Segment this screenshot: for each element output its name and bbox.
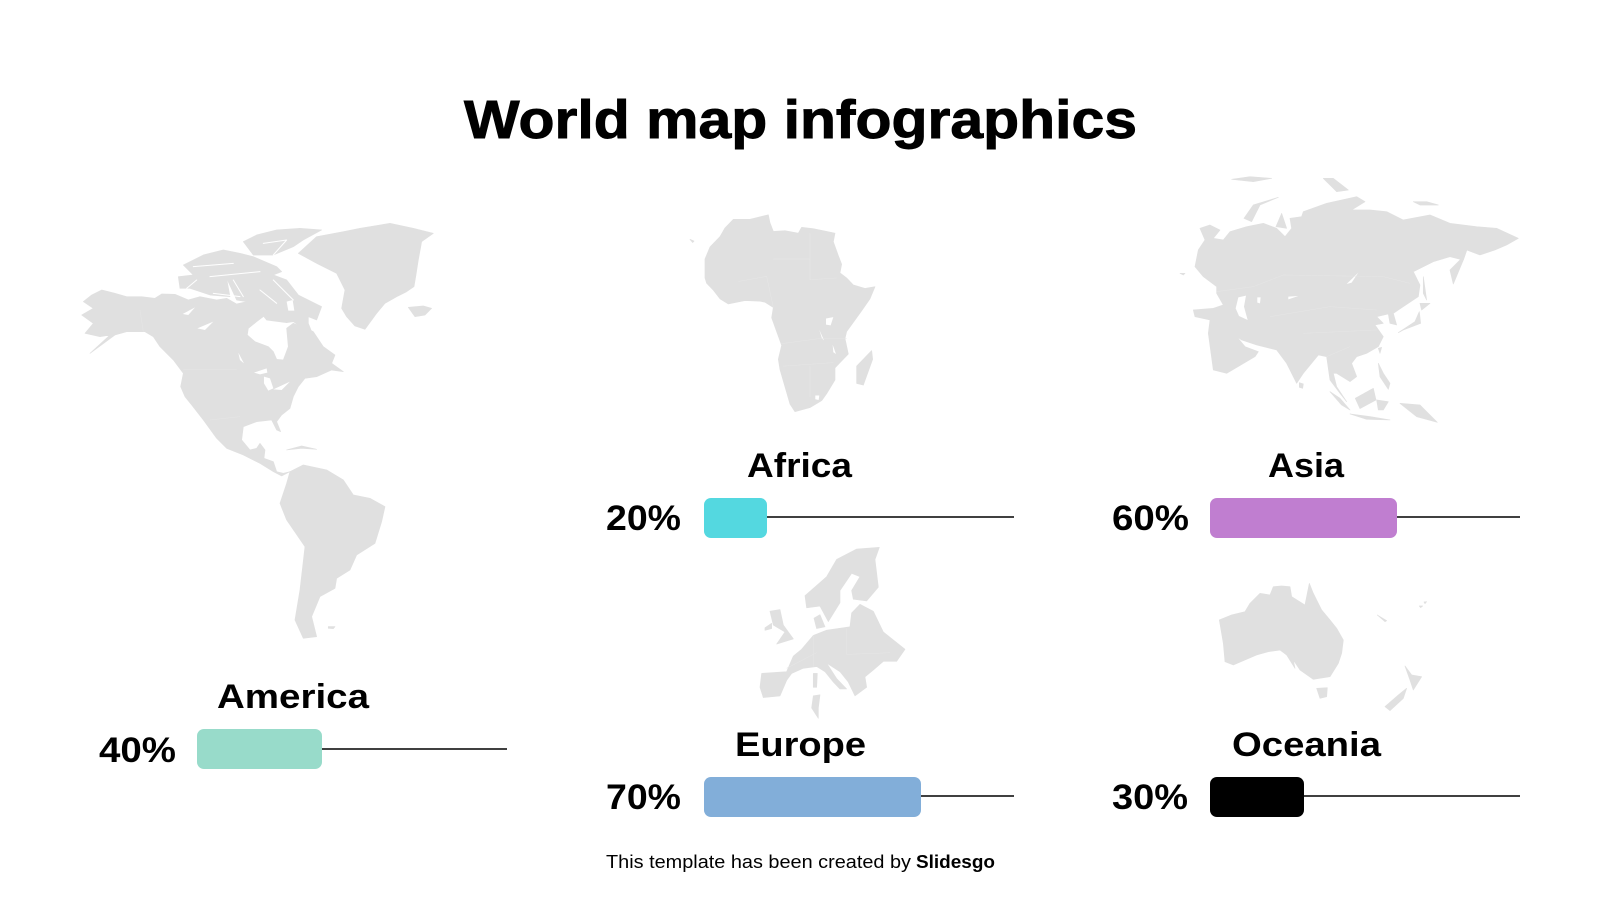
label: Asia: Asia	[1268, 447, 1345, 485]
label: Oceania: Oceania	[1232, 726, 1382, 764]
bar track	[1303, 795, 1520, 797]
value: 30%: 30%	[1112, 778, 1188, 817]
map: Oceania	[1219, 583, 1427, 711]
value: 40%: 40%	[99, 731, 176, 770]
bar fill	[704, 498, 767, 538]
bar fill	[704, 777, 921, 817]
map: America	[82, 223, 433, 638]
footer credit: Slidesgo	[916, 852, 995, 872]
title: World map infographics	[464, 90, 1137, 150]
bar track	[920, 795, 1014, 797]
bar fill	[1210, 498, 1397, 538]
bar fill	[1210, 777, 1304, 817]
bar track	[1396, 516, 1520, 518]
panel: Oceania	[1112, 726, 1520, 817]
bar track	[766, 516, 1014, 518]
panel: America	[99, 678, 507, 770]
value: 70%: 70%	[606, 778, 681, 817]
label: America: America	[217, 678, 370, 716]
bar track	[322, 748, 507, 750]
map: Europe	[760, 547, 905, 718]
map: Africa	[690, 215, 875, 412]
panel: Asia	[1112, 447, 1520, 538]
panel: Africa	[606, 447, 1014, 538]
label: Africa: Africa	[747, 447, 853, 485]
footer credit: This template has been created by	[606, 852, 911, 872]
label: Europe: Europe	[735, 726, 866, 764]
value: 20%: 20%	[606, 499, 681, 538]
bar fill	[197, 729, 322, 769]
map: Asia	[1180, 177, 1518, 422]
panel: Europe	[606, 726, 1014, 817]
value: 60%: 60%	[1112, 499, 1189, 538]
